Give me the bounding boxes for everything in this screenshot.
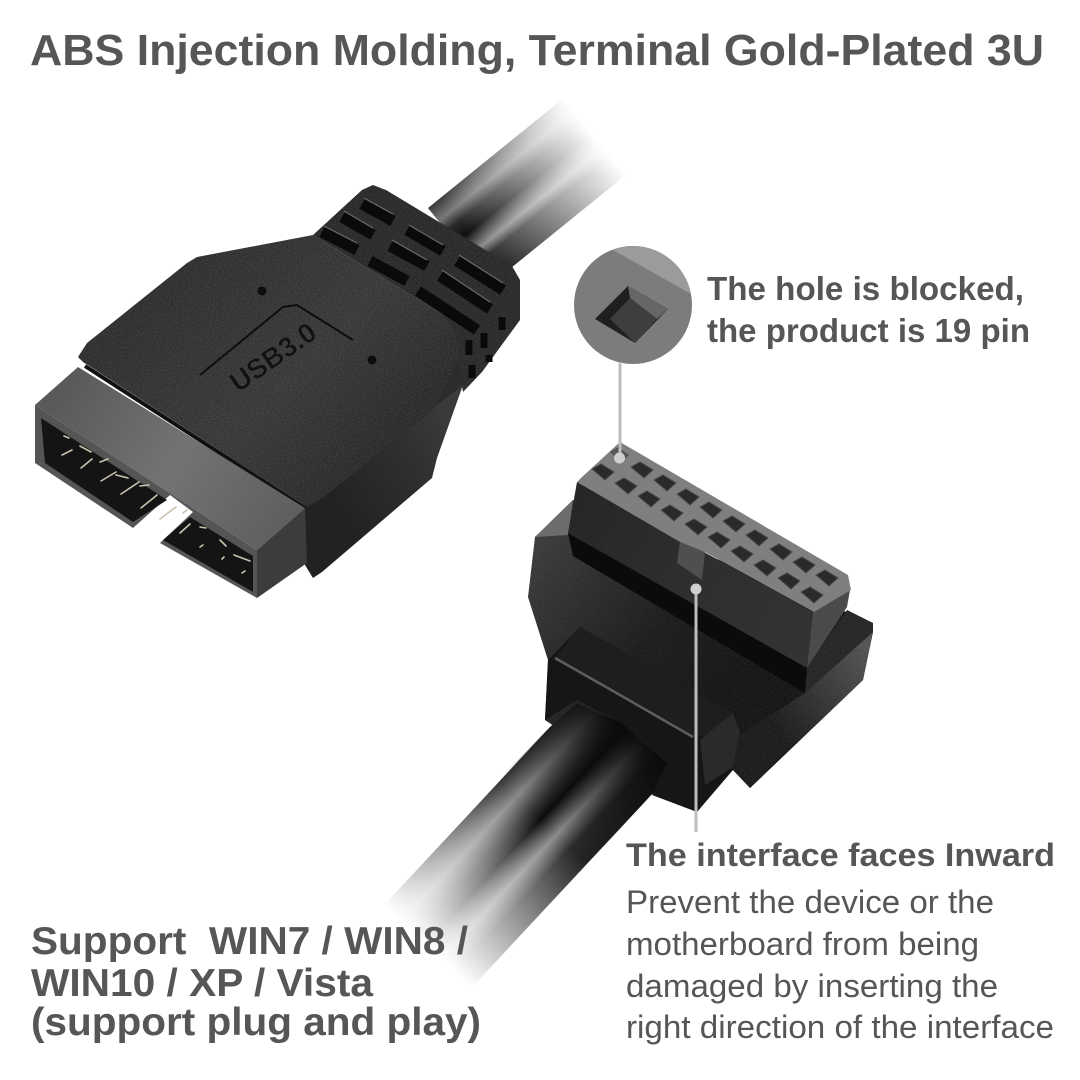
base texture [528,500,873,812]
magnified hole lens [574,246,692,364]
shroud side face [257,508,307,598]
shroud front rim [35,405,257,598]
USB 3.0 recessed label: USB3.0 [224,316,322,398]
compatibility text: (support plug and play) [31,1001,481,1044]
callout: interface direction [626,584,1055,1045]
base block [528,500,873,812]
callout text: the product is 19 pin [707,312,1030,349]
leader line [614,362,625,464]
lower cables fading out [330,703,667,1030]
callout text [707,270,1030,349]
polarity key [677,542,705,580]
title: ABS Injection Molding, Terminal Gold-Plated 3U [30,26,1044,75]
compatibility text [31,920,481,1044]
connector pins [62,436,250,573]
USB 3.0 recessed label [200,305,353,398]
callout body text: motherboard from being [626,926,979,962]
pin holes [592,448,838,603]
grey plug shroud: top face [35,367,305,550]
shadow under housing [568,533,807,693]
compatibility text: Support WIN7 / WIN8 / [31,920,468,963]
edge shadow under body lip [85,366,305,508]
connector body top face [78,235,460,507]
body backing between faces [420,313,463,412]
callout body text: damaged by inserting the [626,968,998,1004]
callout body text [626,884,1054,1045]
housing top face [577,442,851,612]
compatibility text: WIN10 / XP / Vista [31,962,373,1005]
base right facet [733,630,873,788]
base top ledge left [535,500,573,537]
callout body text: Prevent the device or the [626,884,994,920]
callout heading: The interface faces Inward [626,837,1055,873]
callout: blocked hole [574,237,1030,464]
base top ledge right [805,610,873,693]
strain relief with ribs [313,185,520,392]
body texture [78,235,460,507]
leader line [690,584,702,832]
cable cap [545,627,740,812]
top cables fading out [420,0,740,300]
housing front wall [568,482,813,668]
mould dots [258,286,376,364]
socket cavities [41,418,253,592]
callout body text: right direction of the interface [626,1009,1054,1045]
connector body side [305,385,463,578]
illustration: right-angle 19-pin connector with cables [330,442,873,1030]
callout text: The hole is blocked, [707,270,1024,307]
illustration: straight USB 3.0 connector with cables [35,0,740,598]
housing right end [807,590,850,668]
